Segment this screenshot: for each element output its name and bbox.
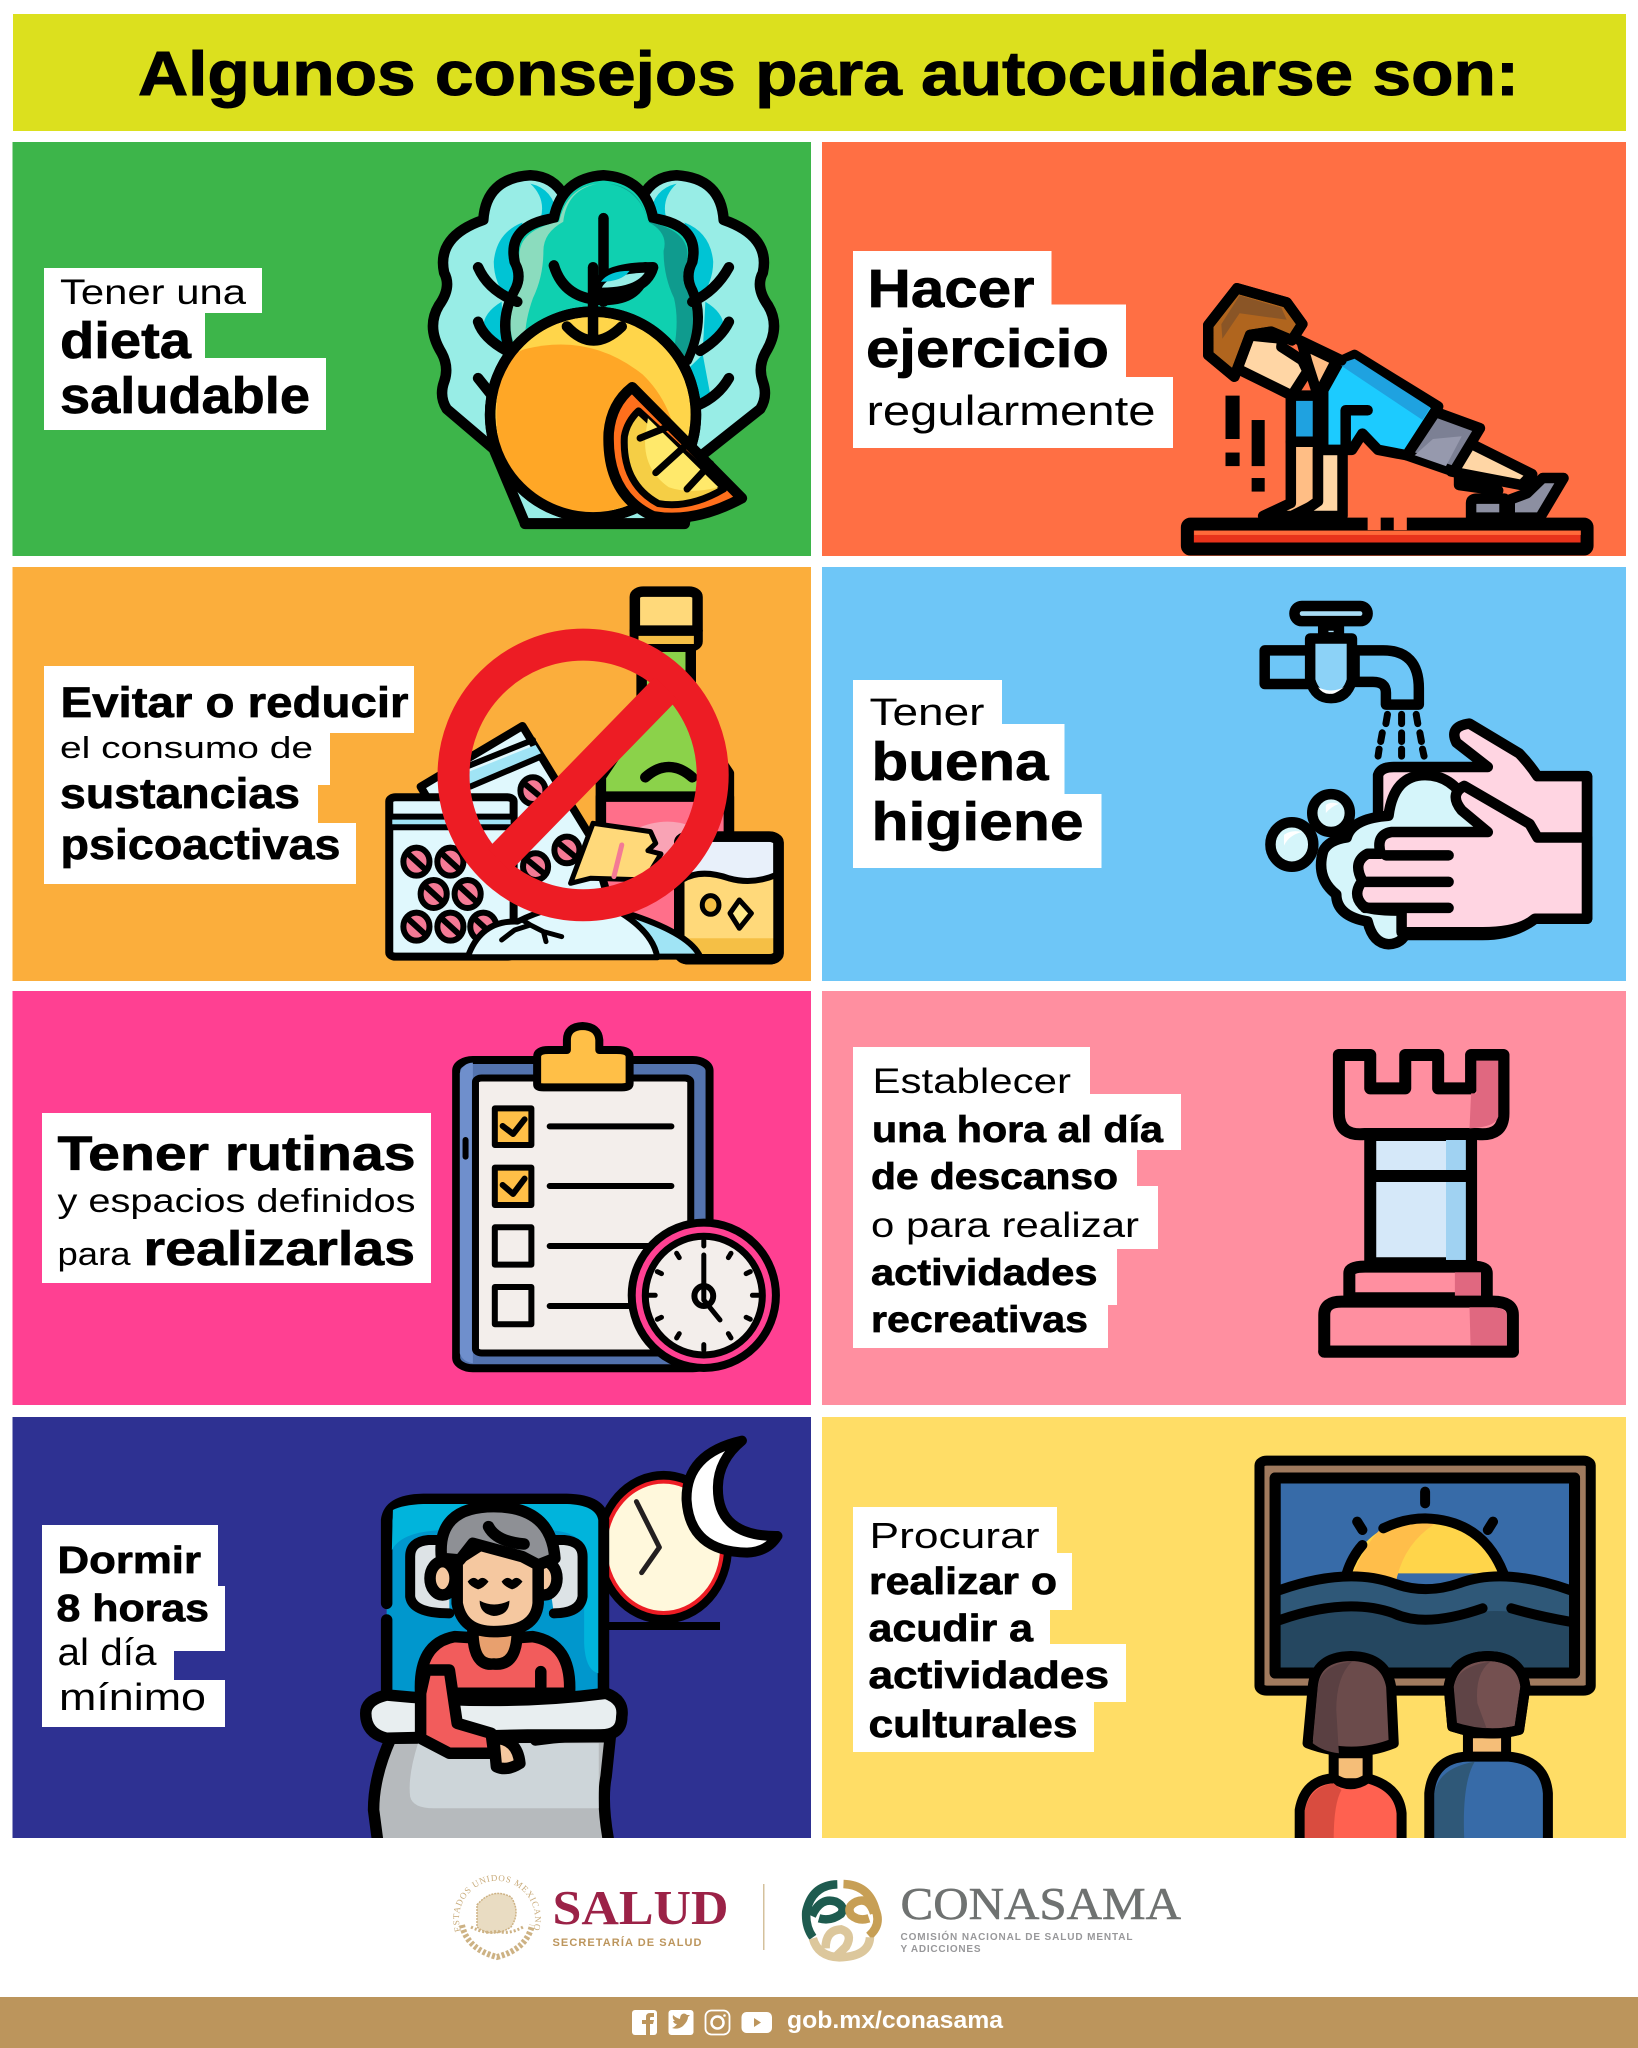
text: evitar o reducir el consumo de sustancias psicoactivas (44, 666, 414, 884)
title banner: Algunos consejos para autocuidarse son: (138, 40, 1519, 109)
text: hacer ejercicio regularmente: regularmente (866, 387, 1156, 434)
icon: youtube (742, 2012, 772, 2033)
icon: instagram (706, 2010, 730, 2034)
panel: actividades culturales (822, 1417, 1626, 1850)
text: tener una dieta saludable (44, 268, 326, 430)
text: establecer una hora al dia de descanso: recreativas (871, 1299, 1088, 1340)
text: hacer ejercicio regularmente (853, 251, 1173, 448)
text: tener rutinas y espacios definidos para realizarlas: y espacios definidos (58, 1182, 416, 1219)
text: dormir 8 horas al dia minimo: 8 horas (56, 1588, 209, 1630)
text: establecer una hora al dia de descanso: de descanso (871, 1156, 1118, 1197)
icon: two people viewing a painting (1259, 1461, 1591, 1850)
icon: mexican coat of arms seal: ESTADOS UNIDOS MEXICANOS (453, 1875, 541, 1932)
icon: clipboard checklist with clock (456, 1026, 776, 1368)
icon: faucet and washing hands (1265, 606, 1587, 944)
text: dormir 8 horas al dia minimo: al día (58, 1632, 157, 1674)
icon: person doing push-ups (1187, 288, 1587, 549)
icon: facebook (632, 2010, 657, 2035)
text: dormir 8 horas al dia minimo (42, 1525, 225, 1727)
text: evitar o reducir el consumo de sustancias psicoactivas: el consumo de (60, 730, 313, 765)
text: tener buena higiene: buena (872, 732, 1050, 792)
logo: secretaria de salud (453, 1875, 728, 1960)
logo: secretaria de salud: SALUD (552, 1880, 728, 1935)
panel: dormir (12, 1417, 811, 1850)
panel: dieta saludable (12, 142, 811, 556)
logo: secretaria de salud: SECRETARÍA DE SALUD (552, 1936, 702, 1949)
text: procurar realizar o acudir a actividades culturales (853, 1507, 1126, 1752)
text: hacer ejercicio regularmente: ejercicio (866, 319, 1109, 379)
logo: conasama: CONASAMA (900, 1878, 1181, 1929)
text: establecer una hora al dia de descanso (853, 1047, 1181, 1348)
icon: twitter (668, 2010, 694, 2035)
text: procurar realizar o acudir a actividades culturales: culturales (868, 1704, 1078, 1746)
text: establecer una hora al dia de descanso: o para realizar (871, 1206, 1139, 1245)
logo: conasama (806, 1878, 1181, 1957)
icon: prohibited alcohol and drugs (389, 592, 779, 959)
text: tener rutinas y espacios definidos para realizarlas: Tener rutinas (58, 1128, 416, 1181)
text: tener rutinas y espacios definidos para realizarlas: para (58, 1236, 131, 1272)
logo: conasama: Y ADICCIONES (900, 1944, 981, 1955)
text: procurar realizar o acudir a actividades culturales: acudir a (868, 1608, 1034, 1650)
panel: tener rutinas (12, 991, 811, 1405)
text: tener una dieta saludable: dieta (60, 312, 192, 369)
panel: sustancias psicoactivas (12, 567, 811, 981)
text: evitar o reducir el consumo de sustancias psicoactivas: psicoactivas (60, 821, 340, 869)
text: tener buena higiene (853, 680, 1102, 868)
text: dormir 8 horas al dia minimo: Dormir (58, 1540, 201, 1582)
icon: chess rook (1324, 1055, 1513, 1352)
text: dormir 8 horas al dia minimo: mínimo (59, 1677, 206, 1719)
logo: conasama: COMISIÓN NACIONAL DE SALUD MENTAL (900, 1930, 1132, 1943)
panel: hora de descanso (822, 991, 1626, 1405)
text: establecer una hora al dia de descanso: Establecer (872, 1062, 1071, 1101)
footer band: gob.mx/conasama (787, 2007, 1004, 2034)
text: establecer una hora al dia de descanso: actividades (871, 1252, 1098, 1293)
text: procurar realizar o acudir a actividades culturales: Procurar (870, 1515, 1040, 1556)
panel: hacer ejercicio (822, 142, 1626, 556)
text: tener una dieta saludable: saludable (60, 367, 310, 424)
text: hacer ejercicio regularmente: Hacer (868, 259, 1034, 319)
text: procurar realizar o acudir a actividades culturales: realizar o (869, 1561, 1057, 1603)
text: tener buena higiene: higiene (872, 792, 1084, 852)
text: tener rutinas y espacios definidos para realizarlas (42, 1113, 431, 1283)
text: establecer una hora al dia de descanso: una hora al día (872, 1109, 1163, 1150)
icon: person sleeping with clock and moon (366, 1441, 777, 1850)
footer band (0, 1997, 1638, 2048)
icon: mexican coat of arms seal (453, 1875, 541, 1960)
text: procurar realizar o acudir a actividades culturales: actividades (868, 1655, 1109, 1697)
text: evitar o reducir el consumo de sustancias psicoactivas: Evitar o reducir (60, 679, 409, 727)
text: tener una dieta saludable: Tener una (60, 273, 247, 312)
icon: conasama knot symbol (806, 1884, 878, 1957)
text: tener buena higiene: Tener (870, 692, 985, 734)
text: tener rutinas y espacios definidos para realizarlas: realizarlas (144, 1223, 415, 1276)
text: evitar o reducir el consumo de sustancias psicoactivas: sustancias (60, 770, 300, 818)
panel: buena higiene (822, 567, 1626, 981)
title banner (13, 14, 1626, 131)
icon: lettuce and orange (433, 175, 774, 524)
